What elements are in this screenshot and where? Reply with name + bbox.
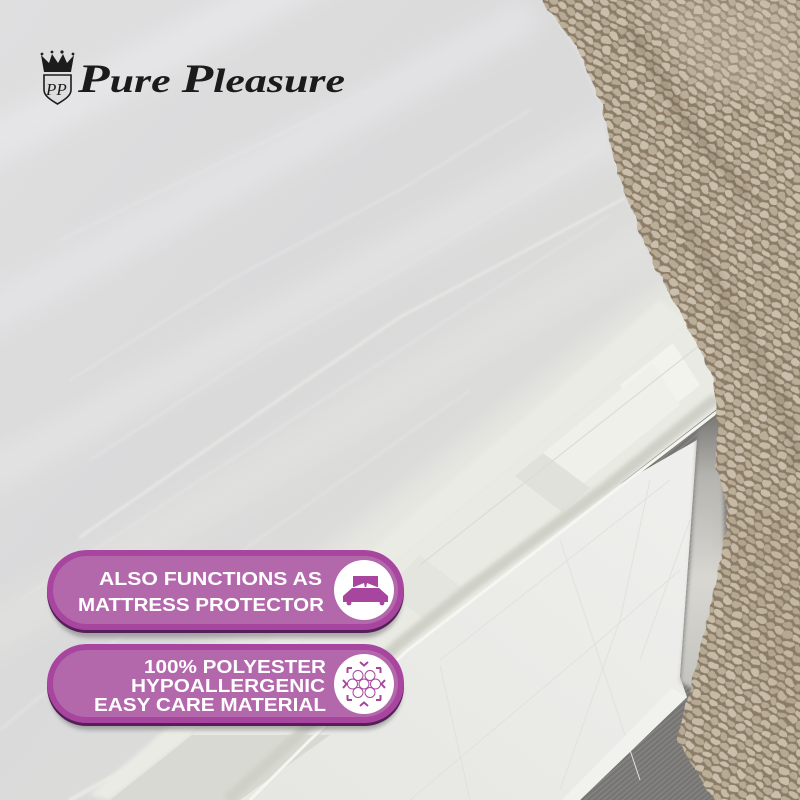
knitted blanket bbox=[525, 0, 800, 800]
badge text: ALSO FUNCTIONS AS bbox=[99, 568, 322, 589]
icon: bed bbox=[334, 560, 394, 620]
grey bed base bbox=[560, 400, 800, 800]
shadow beside blanket bbox=[680, 415, 725, 690]
badge: mattress protector bbox=[47, 550, 404, 638]
groove bbox=[227, 398, 716, 800]
badge: material bbox=[47, 644, 404, 730]
quilted mattress side bbox=[250, 415, 725, 800]
badge text: EASY CARE MATERIAL bbox=[94, 694, 326, 715]
brand name: Pure Pleasure bbox=[77, 56, 345, 101]
logo bbox=[41, 50, 345, 104]
badge text: 100% POLYESTER bbox=[144, 656, 326, 677]
badge text bbox=[94, 656, 326, 715]
badge text: MATTRESS PROTECTOR bbox=[78, 594, 324, 615]
badge text bbox=[78, 568, 324, 615]
icon: fibres bbox=[334, 654, 394, 714]
badge text: HYPOALLERGENIC bbox=[131, 675, 325, 696]
icon: crown and shield bbox=[41, 50, 74, 104]
icon: crown and shield: PP bbox=[45, 80, 67, 99]
mattress border strip bbox=[100, 310, 722, 800]
